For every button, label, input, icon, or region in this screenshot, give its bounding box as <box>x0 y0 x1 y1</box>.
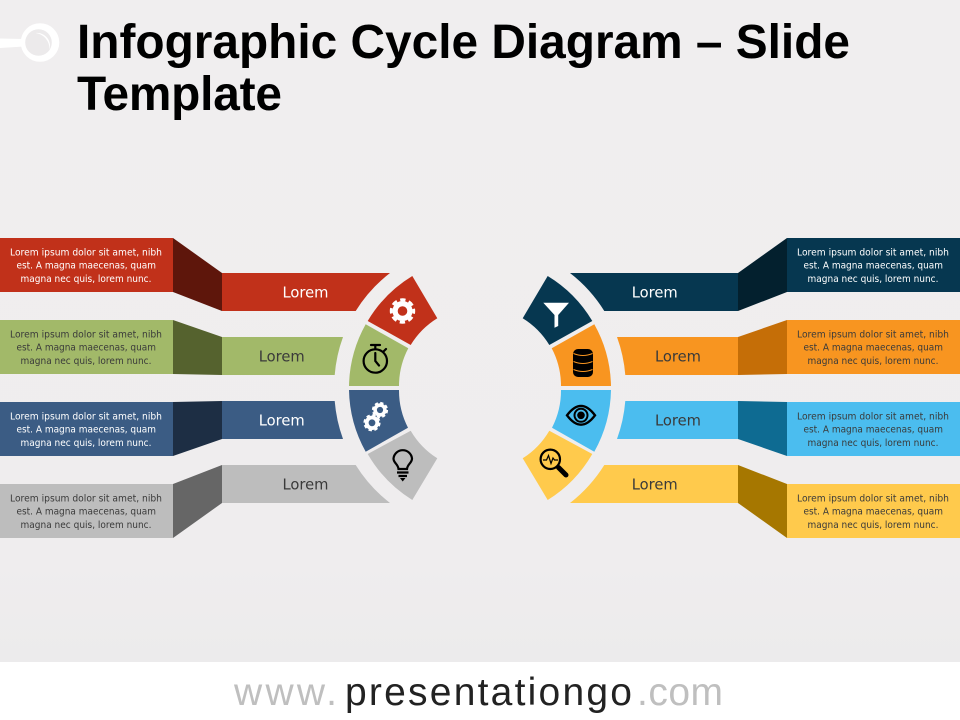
icon: gear <box>391 300 414 322</box>
label: sky blue: Lorem <box>655 412 701 430</box>
description: sky blue: magna nec quis, lorem nunc. <box>808 438 938 449</box>
footer website text <box>233 671 723 714</box>
panel: yellow step <box>523 431 960 538</box>
description: sky blue <box>797 411 949 449</box>
description: sky blue: est. A magna maecenas, quam <box>804 425 943 436</box>
description: red: magna nec quis, lorem nunc. <box>20 274 152 285</box>
description: orange: est. A magna maecenas, quam <box>804 343 943 354</box>
panel: sky blue step <box>552 390 960 456</box>
description: grey <box>10 493 162 531</box>
label: green: Lorem <box>259 348 305 366</box>
label: grey: Lorem <box>282 476 328 494</box>
description: sky blue: Lorem ipsum dolor sit amet, nibh <box>797 411 949 422</box>
description: yellow: Lorem ipsum dolor sit amet, nibh <box>797 493 949 504</box>
title <box>77 16 850 121</box>
description: orange: Lorem ipsum dolor sit amet, nibh <box>797 329 949 340</box>
description: grey: magna nec quis, lorem nunc. <box>20 520 152 531</box>
icon: two gears <box>364 403 387 430</box>
description: navy: est. A magna maecenas, quam <box>804 261 943 272</box>
description: yellow: est. A magna maecenas, quam <box>804 507 943 518</box>
description: yellow <box>797 493 949 531</box>
description: grey: est. A magna maecenas, quam <box>16 507 156 518</box>
footer website text: www. <box>233 671 337 714</box>
description: navy: Lorem ipsum dolor sit amet, nibh <box>797 247 949 258</box>
description: blue <box>10 411 162 449</box>
panel: blue step <box>0 390 408 456</box>
logo pin icon <box>0 23 59 62</box>
label: yellow: Lorem <box>632 476 678 494</box>
icon: database <box>573 349 593 377</box>
description: yellow: magna nec quis, lorem nunc. <box>808 520 938 531</box>
footer website text: presentationgo <box>345 671 632 714</box>
panel: orange step <box>552 320 960 386</box>
description: orange: magna nec quis, lorem nunc. <box>808 356 938 367</box>
panel: navy step <box>523 238 960 345</box>
description: green <box>10 329 162 367</box>
icon: stopwatch <box>364 345 387 373</box>
description: red <box>10 247 162 285</box>
icon: eye <box>567 406 595 425</box>
description: red: est. A magna maecenas, quam <box>16 261 156 272</box>
description: blue: magna nec quis, lorem nunc. <box>20 438 152 449</box>
description: blue: Lorem ipsum dolor sit amet, nibh <box>10 411 162 422</box>
icon: filter <box>543 303 569 328</box>
panel: red step <box>0 238 437 345</box>
description: orange <box>797 329 949 367</box>
description: green: Lorem ipsum dolor sit amet, nibh <box>10 329 162 340</box>
panel: green step <box>0 320 408 386</box>
footer website text: .com <box>637 671 723 714</box>
description: green: magna nec quis, lorem nunc. <box>20 356 152 367</box>
footer band <box>0 662 960 720</box>
panel: grey step <box>0 431 437 538</box>
icon: light bulb <box>394 450 412 482</box>
title: Infographic Cycle Diagram – Slide <box>77 16 850 69</box>
description: red: Lorem ipsum dolor sit amet, nibh <box>10 247 162 258</box>
label: red: Lorem <box>282 284 328 302</box>
label: orange: Lorem <box>655 348 701 366</box>
description: grey: Lorem ipsum dolor sit amet, nibh <box>10 493 162 504</box>
description: navy <box>797 247 949 285</box>
description: green: est. A magna maecenas, quam <box>16 343 156 354</box>
icon: magnifier with pulse <box>541 450 566 475</box>
label: navy: Lorem <box>632 284 678 302</box>
description: navy: magna nec quis, lorem nunc. <box>808 274 938 285</box>
label: blue: Lorem <box>259 412 305 430</box>
description: blue: est. A magna maecenas, quam <box>16 425 156 436</box>
title: Template <box>77 68 282 121</box>
